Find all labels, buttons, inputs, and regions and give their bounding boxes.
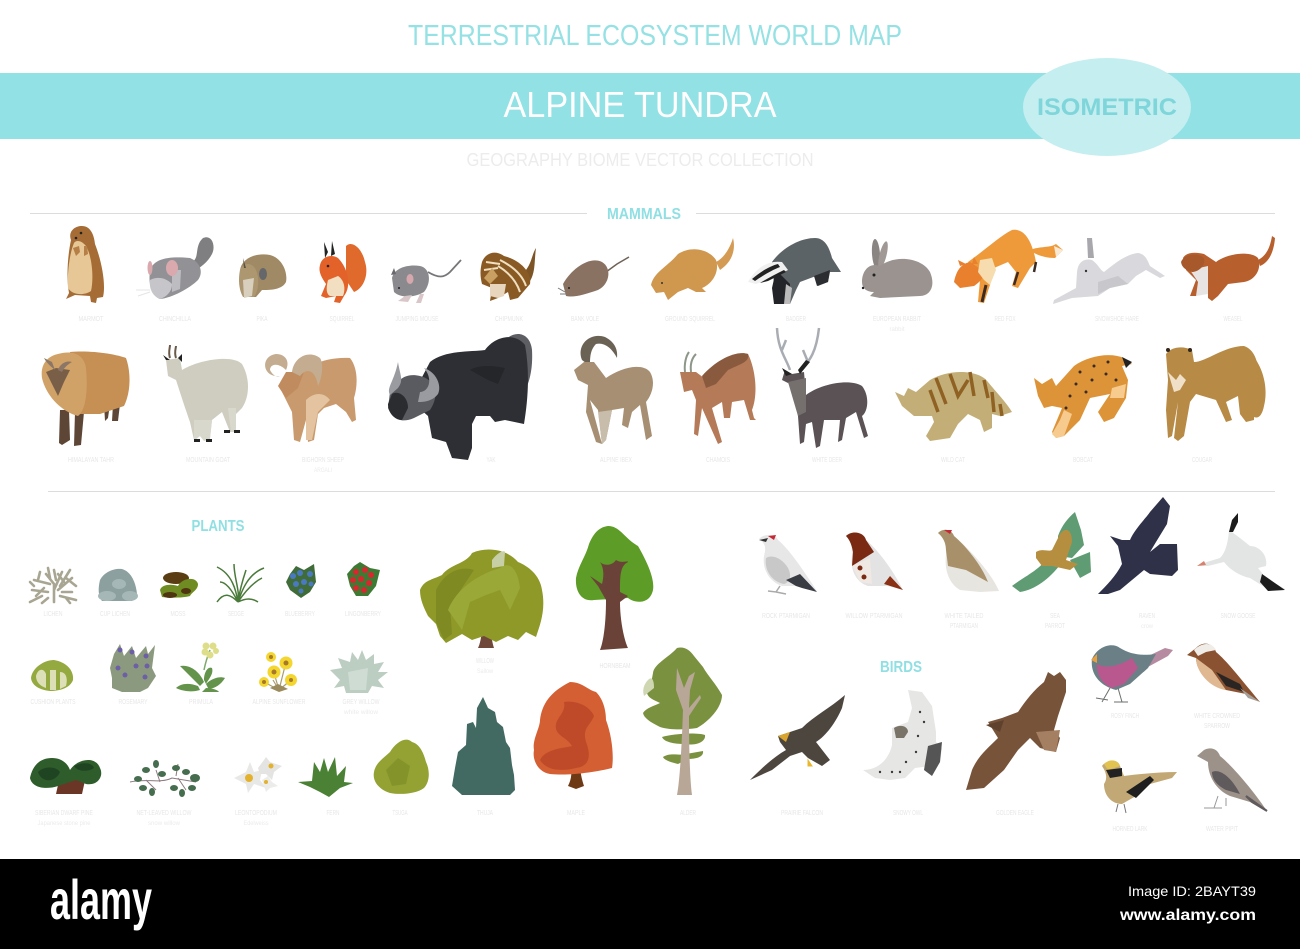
label: chipmunk: CHIPMUNK xyxy=(495,316,523,323)
icon: snowshoe hare xyxy=(1053,238,1165,304)
footer band xyxy=(0,859,1300,949)
heading: birds: BIRDS xyxy=(880,659,922,676)
icon: chamois xyxy=(680,352,756,444)
label: kea sea parrot line 2: PARROT xyxy=(1045,623,1066,630)
icon: wild cat xyxy=(895,372,1012,441)
icon: chinchilla xyxy=(136,237,214,299)
label: white-crowned sparrow line 2: SPARROW xyxy=(1204,723,1230,730)
label: cushion plants: CUSHION PLANTS xyxy=(30,699,76,706)
icon: willow ptarmigan xyxy=(846,533,903,590)
label: bighorn sheep: BIGHORN SHEEP xyxy=(302,457,344,464)
icon: primula xyxy=(176,642,225,692)
label: cup lichen: CUP LICHEN xyxy=(100,611,130,618)
icon: himalayan tahr xyxy=(42,351,130,446)
icon: alpine ibex xyxy=(574,336,653,444)
icon: cushion plants xyxy=(31,660,73,691)
label: grey willow secondary: white willow xyxy=(343,709,378,716)
label: snow goose: SNOW GOOSE xyxy=(1220,613,1256,620)
icon: horned lark xyxy=(1102,760,1177,813)
label: red fox: RED FOX xyxy=(994,316,1016,323)
label: alpine sunflower: ALPINE SUNFLOWER xyxy=(252,699,306,706)
icon: bank vole xyxy=(558,257,629,297)
heading: alpine tundra: ALPINE TUNDRA xyxy=(504,84,776,125)
icon: bobcat xyxy=(1034,355,1132,438)
icon: cougar xyxy=(1166,346,1266,441)
label: raven secondary: crow xyxy=(1141,623,1153,630)
icon: rosy finch xyxy=(1091,645,1173,702)
badge: isometric xyxy=(1023,58,1191,156)
label: chinchilla: CHINCHILLA xyxy=(159,316,191,323)
heading: plants: PLANTS xyxy=(192,518,245,535)
title: TERRESTRIAL ECOSYSTEM WORLD MAP xyxy=(408,20,902,52)
text: website: www.alamy.com xyxy=(1119,907,1256,924)
label: siberian dwarf pine: SIBERIAN DWARF PINE xyxy=(35,810,93,817)
icon: net-leaved willow xyxy=(130,760,200,797)
icon: chipmunk xyxy=(480,248,536,301)
icon: alder tree xyxy=(643,647,722,795)
icon: marmot xyxy=(66,226,104,303)
icon: squirrel xyxy=(319,241,366,303)
panel: mammals xyxy=(42,226,1275,474)
icon: sedge xyxy=(217,564,264,602)
label: fern: FERN xyxy=(326,810,340,817)
label: bighorn sheep secondary: ARGALI xyxy=(314,467,332,474)
icon: yak xyxy=(388,334,532,460)
badge: isometric: ISOMETRIC xyxy=(1037,94,1177,121)
icon: jumping mouse xyxy=(391,260,461,303)
label: rosy finch: ROSY FINCH xyxy=(1111,713,1139,720)
label: moss: MOSS xyxy=(170,611,186,618)
label: net-leaved willow secondary: snow willow xyxy=(148,820,180,827)
label: willow tree secondary: Sallow xyxy=(477,668,493,675)
icon: rock ptarmigan xyxy=(759,535,817,594)
label: european rabbit secondary: rabbit xyxy=(890,326,905,333)
icon: blueberry xyxy=(286,564,316,598)
label: lingonberry: LINGONBERRY xyxy=(345,611,381,618)
icon: moss xyxy=(160,572,198,598)
icon: white-crowned sparrow xyxy=(1187,644,1260,702)
panel: plants xyxy=(30,526,722,827)
label: hornbeam tree: HORNBEAM xyxy=(600,663,631,670)
icon: snowy owl xyxy=(863,690,942,780)
label: wild cat: WILD CAT xyxy=(941,457,966,464)
label: badger: BADGER xyxy=(786,316,806,323)
icon: fern xyxy=(298,757,353,797)
label: bank vole: BANK VOLE xyxy=(571,316,599,323)
label: mountain goat: MOUNTAIN GOAT xyxy=(186,457,231,464)
label: net-leaved willow: NET-LEAVED WILLOW xyxy=(136,810,192,817)
icon: thuja tree xyxy=(452,697,515,795)
panel: birds xyxy=(750,497,1285,833)
label: raven: RAVEN xyxy=(1139,613,1155,620)
label: squirrel: SQUIRREL xyxy=(330,316,355,323)
icon: red fox xyxy=(954,230,1063,303)
icon: lingonberry xyxy=(347,562,380,596)
icon: willow tree xyxy=(420,550,543,648)
icon: prairie falcon xyxy=(750,695,845,780)
label: water pipit: WATER PIPIT xyxy=(1206,826,1239,833)
icon: snow goose xyxy=(1197,513,1285,591)
icon: bighorn sheep xyxy=(265,354,357,442)
label: alder tree: ALDER xyxy=(680,810,696,817)
icon: siberian dwarf pine xyxy=(30,758,101,794)
label: primula: PRIMULA xyxy=(189,699,213,706)
icon: weasel xyxy=(1181,236,1275,301)
icon: lichen xyxy=(30,568,76,603)
label: white deer: WHITE DEER xyxy=(812,457,842,464)
label: jumping mouse: JUMPING MOUSE xyxy=(396,316,439,323)
label: siberian dwarf pine secondary: Japanese stone pine xyxy=(38,820,91,827)
icon: white-tailed ptarmigan xyxy=(938,530,999,592)
label: golden eagle: GOLDEN EAGLE xyxy=(996,810,1034,817)
icon: european rabbit xyxy=(862,239,932,298)
label: alpine ibex: ALPINE IBEX xyxy=(600,457,632,464)
label: leontopodium: LEONTOPODIUM xyxy=(235,810,277,817)
label: blueberry: BLUEBERRY xyxy=(285,611,315,618)
icon: hornbeam tree xyxy=(576,526,653,650)
label: rock ptarmigan: ROCK PTARMIGAN xyxy=(762,613,810,620)
icon: mountain goat xyxy=(163,345,248,442)
label: sedge: SEDGE xyxy=(228,611,244,618)
icon: leontopodium xyxy=(234,757,282,793)
icon: white deer xyxy=(777,328,868,448)
label: snowshoe hare: SNOWSHOE HARE xyxy=(1095,316,1139,323)
header band xyxy=(0,73,1300,139)
label: marmot: MARMOT xyxy=(78,316,104,323)
label: weasel: WEASEL xyxy=(1224,316,1243,323)
label: european rabbit: EUROPEAN RABBIT xyxy=(873,316,922,323)
heading: mammals: MAMMALS xyxy=(607,206,681,223)
label: bobcat: BOBCAT xyxy=(1073,457,1094,464)
label: himalayan tahr: HIMALAYAN TAHR xyxy=(68,457,114,464)
label: chamois: CHAMOIS xyxy=(706,457,730,464)
logo: alamy: alamy xyxy=(50,868,152,931)
label: ground squirrel: GROUND SQUIRREL xyxy=(665,316,715,323)
label: grey willow: GREY WILLOW xyxy=(342,699,380,706)
icon: raven xyxy=(1098,497,1178,594)
label: rosemary: ROSEMARY xyxy=(118,699,148,706)
subtitle: GEOGRAPHY BIOME VECTOR COLLECTION xyxy=(466,150,814,170)
label: white-tailed ptarmigan: WHITE TAILED xyxy=(944,613,984,620)
icon: kea sea parrot xyxy=(1012,512,1091,592)
label: yak: YAK xyxy=(486,457,496,464)
label: white-crowned sparrow: WHITE CROWNED xyxy=(1194,713,1240,720)
icon: maple tree xyxy=(534,682,613,789)
label: cougar: COUGAR xyxy=(1192,457,1212,464)
label: horned lark: HORNED LARK xyxy=(1112,826,1148,833)
label: kea sea parrot: SEA xyxy=(1050,613,1060,620)
icon: water pipit xyxy=(1197,748,1267,811)
icon: cup lichen xyxy=(98,569,138,601)
label: willow tree: WILLOW xyxy=(476,658,494,665)
label: leontopodium secondary: Edelweiss xyxy=(244,820,269,827)
label: pika: PIKA xyxy=(256,316,268,323)
label: prairie falcon: PRAIRIE FALCON xyxy=(781,810,823,817)
icon: golden eagle xyxy=(966,672,1066,790)
label: willow ptarmigan: WILLOW PTARMIGAN xyxy=(846,613,902,620)
icon: badger xyxy=(748,238,841,304)
label: white-tailed ptarmigan line 2: PTARMIGAN xyxy=(950,623,978,630)
label: thuja tree: THUJA xyxy=(477,810,493,817)
icon: ground squirrel xyxy=(651,238,734,300)
label: tsuga shrub: TSUGA xyxy=(392,810,408,817)
label: lichen: LICHEN xyxy=(44,611,62,618)
icon: alpine sunflower xyxy=(259,652,297,692)
text: image id: Image ID: 2BAYT39 xyxy=(1128,883,1256,899)
icon: pika xyxy=(239,254,286,298)
icon: rosemary xyxy=(110,644,156,692)
icon: grey willow xyxy=(330,650,388,693)
label: snowy owl: SNOWY OWL xyxy=(893,810,923,817)
label: maple tree: MAPLE xyxy=(567,810,585,817)
icon: tsuga shrub xyxy=(374,740,429,794)
